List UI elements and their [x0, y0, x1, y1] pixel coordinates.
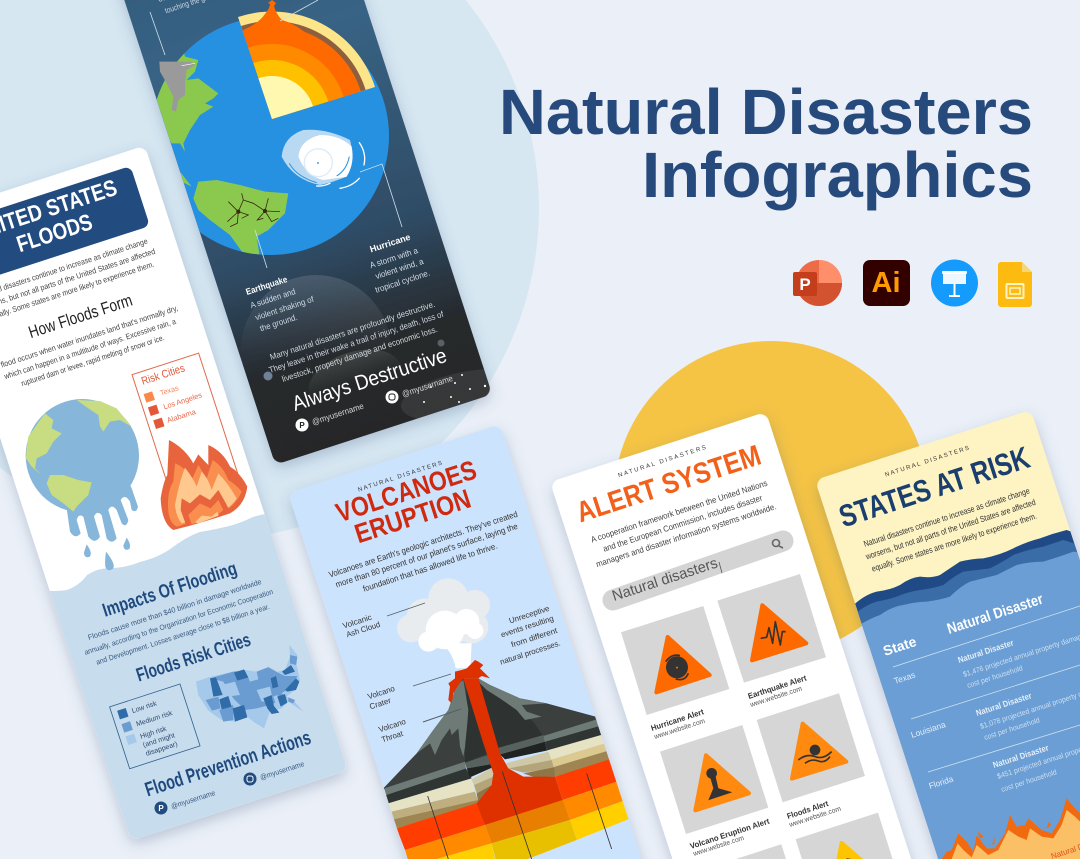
- earth core wedge: [238, 0, 375, 119]
- text: unreceptive events: events resulting: [500, 614, 555, 639]
- panel: united states floods card: [0, 147, 352, 850]
- text: volcano intro: Volcanoes are Earth's geologic architects. They've created: [327, 509, 519, 579]
- text: unreceptive events: from different: [510, 626, 559, 649]
- legend: disappear): [145, 741, 179, 758]
- title: Natural Disasters: [499, 76, 1033, 148]
- heading: volcanoes eruption: [332, 455, 480, 549]
- text: alert intro: A cooperation framework between the United Nations: [590, 478, 769, 544]
- captions: [650, 673, 842, 858]
- heading: always destructive: Always Destructive: [289, 344, 450, 416]
- table row: Louisiana: Natural Disaster: [975, 690, 1033, 718]
- text: hurricane label: Hurricane: [369, 232, 412, 254]
- tile: volcano eruption alert: [660, 725, 768, 834]
- social handles dark card: @myusername: [401, 373, 454, 399]
- social handles flood card: P: [158, 804, 164, 813]
- heading: volcanoes eruption: ERUPTION: [351, 484, 474, 549]
- icon: flood: [798, 745, 832, 763]
- legend: Medium risk: [135, 710, 174, 728]
- kicker: NATURAL DISASTERS: [884, 446, 970, 478]
- text: unreceptive events: natural processes.: [499, 639, 562, 667]
- decorative yellow circle: [614, 341, 928, 655]
- captions: Volcano Eruption Alert: [689, 817, 771, 851]
- icon: tornado: [159, 62, 195, 112]
- ash cloud: [397, 578, 490, 668]
- continent: north america: [156, 54, 218, 152]
- kicker: NATURAL DISASTERS: [618, 445, 707, 479]
- fire border: [942, 798, 1080, 859]
- social handles flood card: @myusername: [259, 759, 305, 782]
- legend: (and might: [142, 732, 176, 749]
- tile: earthquake alert: [717, 574, 826, 683]
- panel: volcanoes eruption card: [285, 426, 648, 859]
- mountain: [383, 678, 602, 790]
- captions: www.website.com: [653, 718, 706, 741]
- table row: Texas: Texas: [893, 670, 917, 686]
- text: impacts body: annually, according to the Organization for Economic Cooperation: [83, 587, 274, 657]
- text: states intro: equally. Some states are more likely to experience them.: [870, 511, 1038, 574]
- text: impacts body: Floods cause more than $40 billion in damage worldwide: [87, 577, 263, 642]
- text: destructive paragraph: livestock, property damage and economic loss.: [281, 324, 439, 384]
- heading: states at risk: STATES AT RISK: [835, 440, 1034, 534]
- legend: [110, 684, 200, 769]
- captions: www.website.com: [788, 806, 842, 829]
- text: hurricane label: tropical cyclone.: [374, 268, 431, 295]
- tile: floods alert: [757, 693, 865, 802]
- rock bands center: [465, 735, 545, 768]
- molten layers: [397, 757, 622, 850]
- continent: south america: [193, 180, 288, 258]
- table row: Texas: Natural Disaster: [957, 637, 1015, 665]
- table row: Texas: [893, 631, 1080, 690]
- leader lines: [150, 0, 402, 268]
- text: destructive paragraph: Many natural disasters are profoundly destructive.: [269, 299, 436, 362]
- text: volcano callouts: Ash Cloud: [345, 620, 381, 639]
- wave: light and table background: [857, 552, 1080, 859]
- software icons: [793, 260, 1032, 307]
- legend: Low risk: [131, 700, 158, 715]
- text: volcano callouts: Throat: [380, 729, 405, 744]
- table row: Florida: [928, 734, 1080, 794]
- captions: Hurricane Alert: [650, 707, 705, 733]
- text: how floods form body: ruptured dam or levee, rapid melting of snow or ice.: [20, 333, 165, 388]
- table row: Louisiana: cost per household: [983, 715, 1041, 742]
- wave: medium: [858, 540, 1080, 646]
- captions: Earthquake Alert: [747, 673, 808, 701]
- table row: Louisiana: Louisiana: [910, 719, 947, 740]
- heading: how floods form: How Floods Form: [26, 291, 135, 342]
- icon: hurricane: [666, 655, 688, 680]
- icon: Illustrator: [863, 260, 910, 306]
- text: alert intro: managers and disaster information systems worldwide.: [595, 501, 777, 569]
- icon: Keynote: [931, 260, 978, 306]
- captions: www.website.com: [749, 686, 803, 709]
- text: states intro: Natural disasters continue to increase as climate change: [862, 485, 1031, 549]
- risk cities box: Alabama: [166, 407, 198, 425]
- social handles flood card: [154, 759, 305, 814]
- text: earthquake label: A sudden and: [249, 286, 297, 310]
- globe chart: [147, 0, 389, 258]
- rock bands left: [384, 762, 466, 795]
- wave: lower section background: [50, 514, 346, 838]
- panel: dark natural disasters card: [116, 0, 496, 473]
- table row: Florida: Florida: [928, 774, 955, 791]
- social handles dark card: [296, 373, 454, 432]
- social handles dark card: P: [299, 421, 305, 430]
- tile: hurricane alert: [621, 606, 729, 715]
- icon: volcano: [706, 768, 732, 800]
- text: hurricane label: A storm with a: [368, 245, 419, 270]
- table row: Florida: cost per household: [1000, 767, 1058, 794]
- text: destructive paragraph: They leave in their wake a trail of injury, death, loss of: [268, 309, 445, 375]
- social handles flood card: @myusername: [170, 788, 216, 811]
- text: hurricane label: violent wind, a: [374, 256, 425, 281]
- text: how floods form body: which can happen in a multitude of ways. Excessive rain, a: [2, 317, 177, 381]
- table header: [881, 591, 1045, 659]
- kicker: NATURAL DISASTERS: [357, 461, 443, 493]
- decorative light blue circle: [0, 0, 539, 540]
- risk cities box: Risk Cities: [140, 362, 187, 388]
- text: earthquake label: the ground.: [258, 312, 299, 333]
- text: unreceptive events: Unreceptive: [508, 604, 551, 625]
- table header: State: [881, 633, 918, 659]
- risk cities box: Texas: [159, 383, 180, 398]
- title banner: FLOODS: [13, 208, 95, 257]
- captions: Floods Alert: [786, 799, 830, 821]
- icon: PowerPoint: P: [799, 275, 811, 294]
- heading: volcanoes eruption: VOLCANOES: [332, 455, 480, 528]
- text: impacts body: and Development. Losses average close to $8 billion a year.: [95, 602, 271, 667]
- map: united states risk: [196, 645, 303, 728]
- heading: floods risk cities: Floods Risk Cities: [134, 630, 253, 686]
- text: volcano callouts: Crater: [368, 696, 392, 711]
- tile: lower row: [736, 812, 892, 859]
- text: volcano intro: foundation that has allowed life to thrive.: [361, 541, 499, 594]
- fire body: [952, 810, 1080, 859]
- text: states intro: worsens, but not all parts of the United States are affected: [864, 497, 1037, 562]
- table row: Texas: cost per household: [966, 663, 1024, 690]
- title banner: [0, 166, 150, 284]
- title: [499, 76, 1033, 211]
- panel: alert system card: [546, 413, 918, 859]
- wave: dark: [855, 530, 1080, 641]
- icon: search: [772, 540, 783, 548]
- callout lines: [387, 603, 461, 722]
- table dividers: [893, 606, 1080, 772]
- icon: melting globe: [26, 399, 139, 570]
- panel: states at risk card: [815, 410, 1080, 859]
- icon: Illustrator: Ai: [872, 267, 900, 299]
- text: unreceptive events: [499, 604, 562, 667]
- search bar: [610, 540, 783, 605]
- icon: Google Slides: [998, 262, 1032, 307]
- rock bands right: [544, 720, 598, 742]
- captions: www.website.com: [692, 835, 745, 858]
- icon: hurricane: [282, 130, 365, 188]
- social handles dark card: @myusername: [311, 401, 365, 427]
- text: volcano intro: more than 80 percent of our planet's surface, laying the: [334, 521, 519, 589]
- search bar: Natural disasters: [610, 555, 720, 605]
- text: volcano callouts: Volcano: [367, 684, 396, 701]
- lava: [463, 678, 563, 825]
- title: Infographics: [642, 139, 1033, 211]
- text: volcano callouts: [342, 613, 407, 744]
- core lines: [428, 772, 612, 859]
- icon: earthquake cracks: [227, 193, 280, 227]
- text: volcano callouts: Volcanic: [342, 613, 373, 631]
- icon: seismograph: [761, 622, 786, 645]
- text: earthquake label: Earthquake: [245, 274, 289, 297]
- table header: Natural Disaster: [945, 591, 1045, 638]
- text: alert intro: and the European Commission, includes disaster: [602, 493, 764, 554]
- heading: impacts of flooding: Impacts Of Flooding: [100, 558, 240, 622]
- icon: PowerPoint: [793, 260, 842, 306]
- table row: Florida: Natural Disaster: [992, 742, 1050, 770]
- risk cities box: Los Angeles: [162, 390, 203, 411]
- text: earthquake label: violent shaking of: [254, 294, 315, 322]
- icon: flame: [161, 440, 247, 530]
- text: hurricane label: [361, 230, 431, 295]
- legend: High risk: [139, 725, 168, 741]
- text: volcano callouts: Volcano: [378, 717, 407, 734]
- table row: Louisiana: [910, 683, 1080, 742]
- heading: flood prevention actions: Flood Prevention Actions: [142, 727, 314, 801]
- heading: alert system: ALERT SYSTEM: [572, 440, 765, 529]
- text: earthquake label: [245, 268, 319, 334]
- risk cities box: [132, 353, 238, 495]
- volcano cross-section: [383, 660, 631, 859]
